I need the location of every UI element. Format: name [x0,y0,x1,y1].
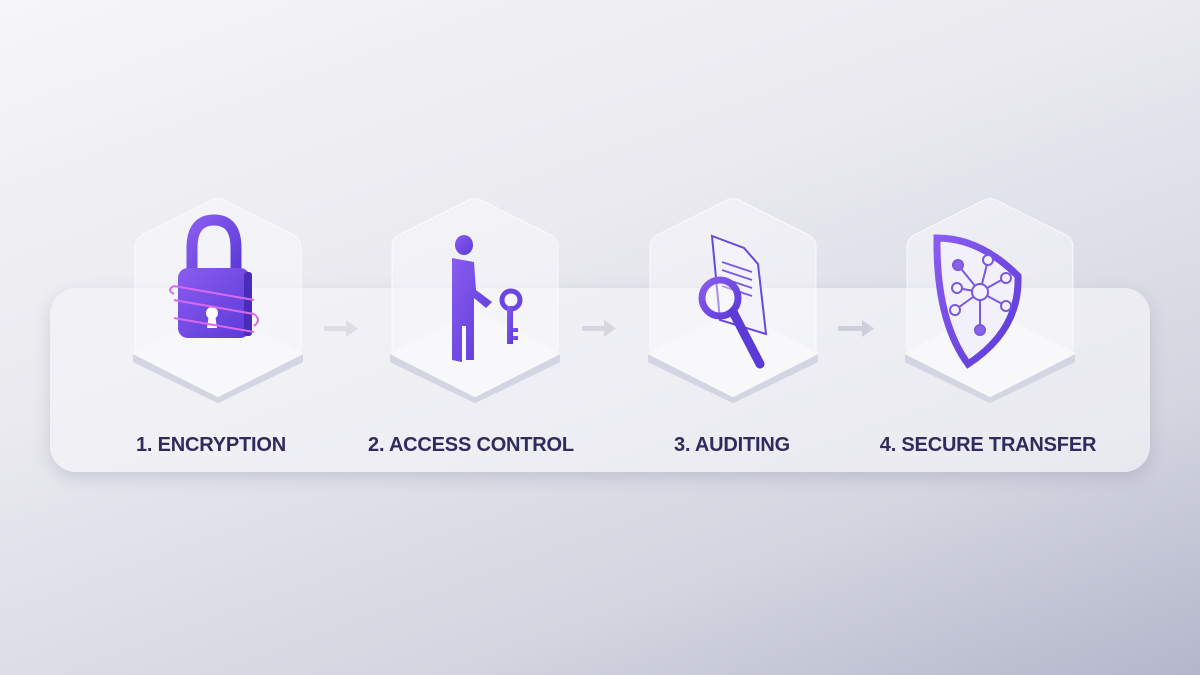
arrow 3 [838,320,874,337]
step 4 hexagon [907,198,1073,401]
label: step 4: 4. SECURE TRANSFER [880,434,1096,456]
panel: process strip [50,288,1150,472]
step 1 hexagon [135,198,301,401]
step 3 hexagon [650,198,816,401]
label: step 3: 3. AUDITING [674,434,790,456]
label: step 2: 2. ACCESS CONTROL [368,434,574,456]
arrow 1 [324,320,358,337]
arrow 2 [582,320,616,337]
step 2 hexagon [392,198,558,401]
icon: shield with network [937,238,1018,364]
label: step 1: 1. ENCRYPTION [136,434,286,456]
icon: person with key [452,235,520,362]
icon: document with magnifier [702,236,766,364]
icon: padlock [170,220,258,338]
